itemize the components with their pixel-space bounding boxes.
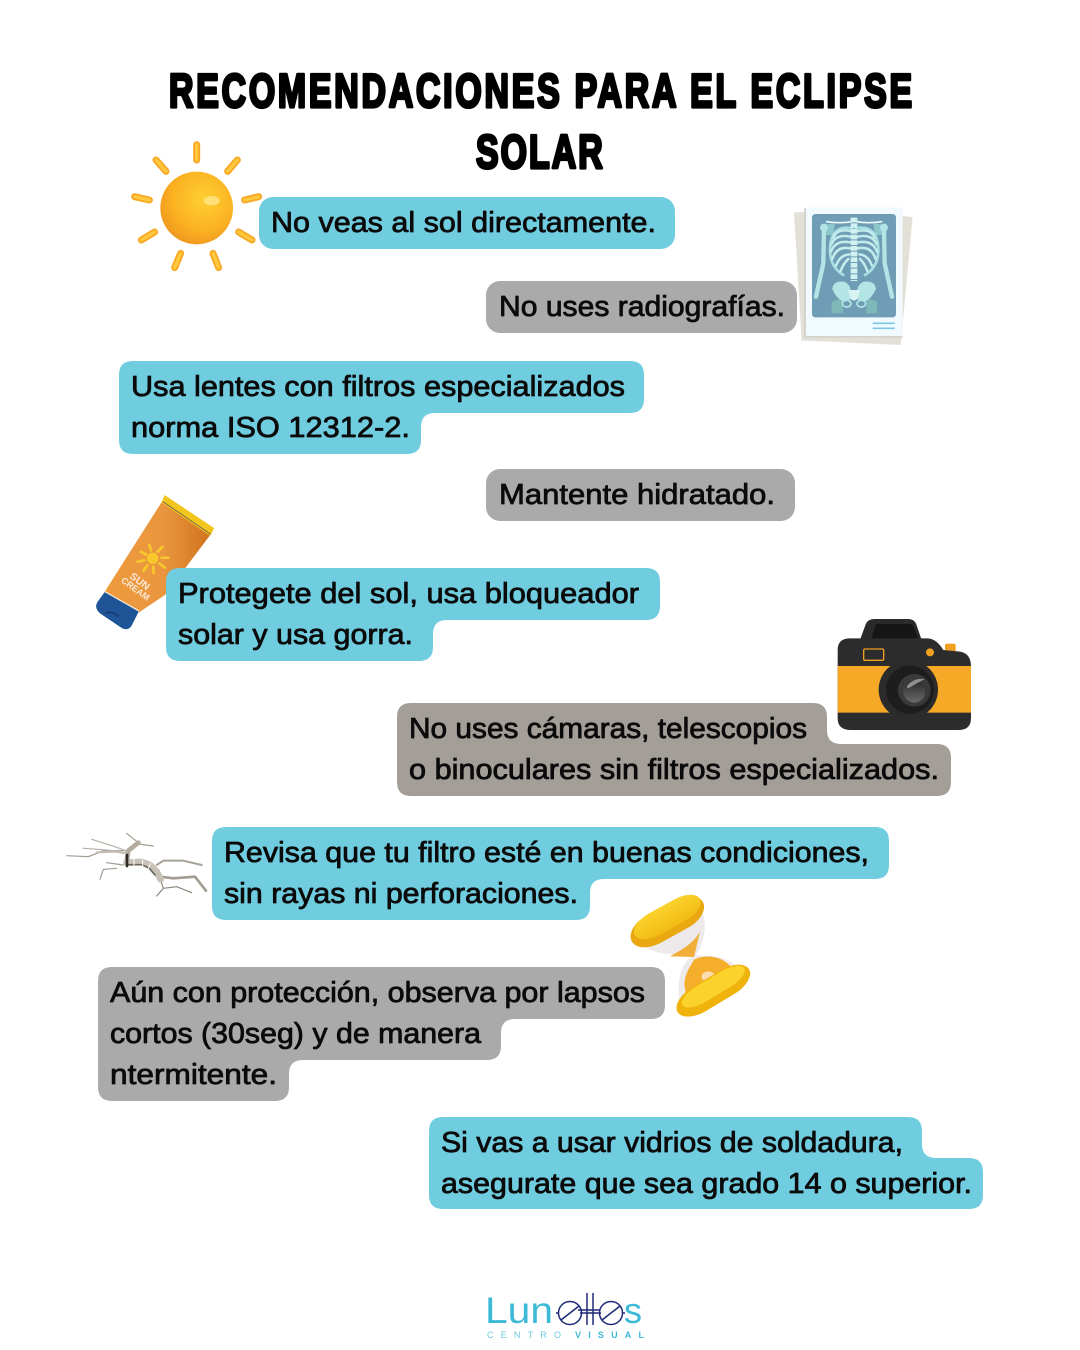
- bubble: vidrios de soldadura: Si vas a usar vidrios de soldadura,: [441, 1127, 903, 1159]
- bubble: revisa tu filtro: [212, 827, 889, 920]
- icon: sunscreen tube: [96, 496, 213, 629]
- logo: Lunettes centro visual: VISUAL: [575, 1330, 644, 1340]
- bubble: no veas al sol: [259, 197, 675, 249]
- title: RECOMENDACIONES PARA EL ECLIPSE: [169, 65, 912, 117]
- bubble: revisa tu filtro: sin rayas ni perforaciones.: [224, 878, 578, 910]
- title: [169, 65, 912, 178]
- logo: Lunettes centro visual: CENTRO: [487, 1330, 561, 1340]
- bubble: revisa tu filtro: Revisa que tu filtro esté en buenas condiciones,: [224, 837, 869, 869]
- title: SOLAR: [476, 126, 603, 178]
- icon: hourglass: [624, 888, 756, 1024]
- bubble: protegete del sol: solar y usa gorra.: [178, 619, 413, 651]
- bubble: no veas al sol: No veas al sol directamente.: [271, 207, 656, 239]
- icon: sunscreen tube: SUN: [127, 571, 151, 593]
- bubble: aun con proteccion: ntermitente.: [110, 1059, 277, 1091]
- icon: sun: [135, 145, 259, 268]
- bubble: usa lentes con filtros: [119, 361, 644, 454]
- bubble: usa lentes con filtros: norma ISO 12312-2.: [131, 412, 410, 444]
- icon: camera: [838, 619, 971, 730]
- bubble: vidrios de soldadura: asegurate que sea grado 14 o superior.: [441, 1168, 972, 1200]
- bubble: no uses radiografias: No uses radiografías.: [499, 291, 785, 323]
- bubble: mantente hidratado: [486, 469, 795, 521]
- icon: sunscreen tube: CREAM: [119, 575, 152, 603]
- bubble: aun con proteccion: Aún con protección, observa por lapsos: [110, 977, 645, 1009]
- logo: Lunettes centro visual: s: [624, 1290, 642, 1331]
- bubble: protegete del sol: [166, 568, 660, 661]
- bubble: no uses camaras: [397, 703, 951, 796]
- bubble: no uses radiografias: [486, 281, 797, 333]
- logo: Lunettes centro visual: [485, 1290, 644, 1340]
- bubble: protegete del sol: Protegete del sol, usa bloqueador: [178, 578, 639, 610]
- bubble: no uses camaras: No uses cámaras, telescopios: [409, 713, 807, 745]
- bubble: mantente hidratado: Mantente hidratado.: [499, 479, 775, 511]
- icon: glass crack: [67, 833, 206, 896]
- bubble: vidrios de soldadura: [429, 1117, 983, 1209]
- bubble: aun con proteccion: cortos (30seg) y de manera: [110, 1018, 482, 1050]
- bubble: aun con proteccion: [98, 967, 665, 1101]
- bubble: usa lentes con filtros: Usa lentes con filtros especializados: [131, 371, 625, 403]
- icon: x-ray film: [794, 207, 913, 345]
- bubble: no uses camaras: o binoculares sin filtros especializados.: [409, 754, 939, 786]
- logo: Lunettes centro visual: Lun: [485, 1290, 553, 1331]
